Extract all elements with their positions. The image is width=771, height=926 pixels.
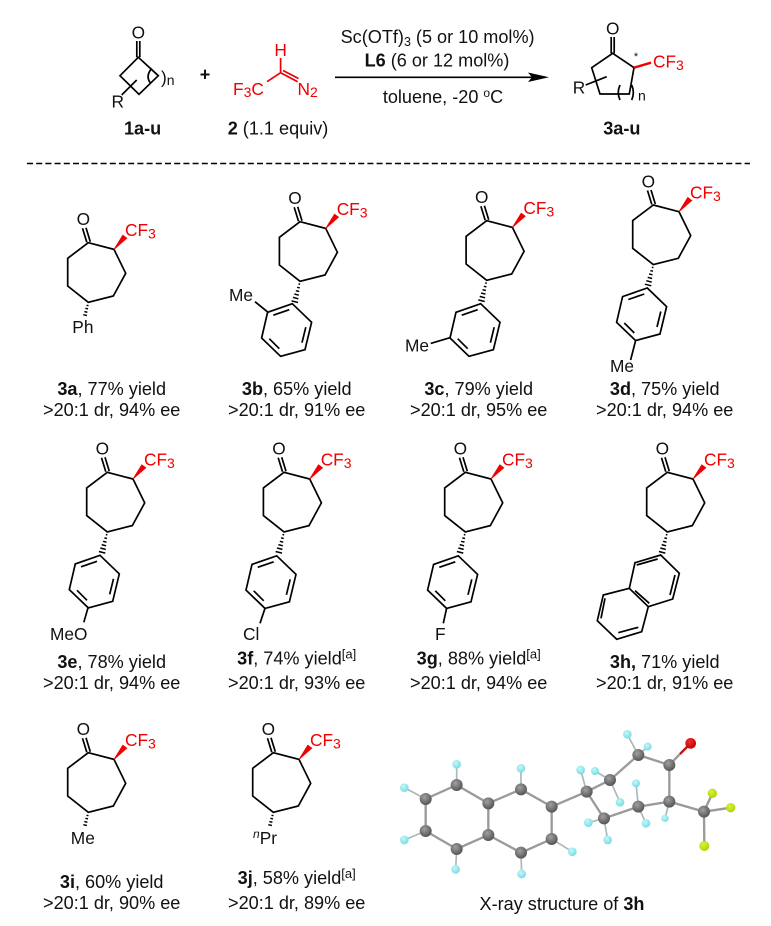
x-ray caption: X-ray structure of 3h: [480, 894, 644, 914]
reactant 2 diazo compound: [233, 40, 318, 100]
compound 3b: >20:1 dr, 91% ee: [228, 400, 365, 420]
structure 3c: 3: [546, 203, 554, 219]
product general structure: *: [634, 51, 639, 63]
fluorine atoms: [699, 789, 735, 851]
product general structure: O: [606, 18, 619, 38]
structure 3c: [405, 187, 554, 356]
reaction conditions: o: [483, 86, 490, 100]
scheme labels: [124, 118, 640, 138]
structure 3d: 3: [713, 188, 721, 204]
compound 3d: >20:1 dr, 94% ee: [596, 400, 733, 420]
structure 3e: 3: [167, 455, 175, 471]
compound 3e: >20:1 dr, 94% ee: [43, 673, 180, 693]
structure 3b: O: [288, 188, 302, 208]
carbon skeleton bonds: [426, 755, 731, 853]
structure 3e: CF: [144, 450, 167, 470]
compound 3a: >20:1 dr, 94% ee: [43, 400, 180, 420]
compound 3g: >20:1 dr, 94% ee: [410, 673, 547, 693]
x-ray crystal structure of 3h: [400, 730, 735, 914]
structure 3j: n: [253, 827, 260, 841]
structure 3i: CF: [125, 730, 148, 750]
caption 3a: 3a, 77% yield: [57, 379, 166, 399]
reaction conditions: (5 or 10 mol%): [411, 27, 535, 47]
reactant 1 ketone: R: [112, 92, 124, 112]
plus sign: +: [200, 64, 210, 84]
caption 3j: [a]: [341, 866, 356, 881]
caption 3h: 3h, 71% yield: [610, 652, 720, 672]
reaction arrow: [335, 72, 549, 82]
structure 3h: CF: [704, 450, 727, 470]
reactant 2 diazo compound: 2: [310, 84, 318, 100]
caption 3f: 3f, 74% yield: [237, 649, 342, 669]
scheme labels: 3a-u: [603, 118, 640, 138]
compound 3j: >20:1 dr, 89% ee: [228, 893, 365, 913]
structure 3e: [50, 439, 175, 644]
reactant 2 diazo compound: 3: [244, 84, 252, 100]
structure 3i: [68, 719, 156, 848]
compound 3h: [596, 439, 735, 693]
compound 3h: >20:1 dr, 91% ee: [596, 673, 733, 693]
structure 3a: O: [77, 209, 90, 229]
product general structure: R: [573, 78, 585, 98]
product general structure: CF: [653, 52, 676, 72]
structure 3h: 3: [727, 455, 735, 471]
structure 3f: Cl: [243, 624, 259, 644]
compound 3j: [228, 719, 365, 913]
structure 3c: Me: [405, 336, 429, 356]
reactant 1 ketone: n: [167, 72, 175, 88]
structure 3d: CF: [690, 182, 713, 202]
reaction conditions: 3: [404, 35, 411, 49]
compound 3a: [43, 209, 180, 420]
reactant 2 diazo compound: H: [274, 40, 287, 60]
structure 3f: CF: [321, 450, 344, 470]
reaction conditions: [341, 27, 535, 107]
structure 3b: [229, 188, 368, 356]
reaction conditions: toluene, -20: [383, 87, 478, 107]
hydrogen atoms: [400, 730, 669, 878]
structure 3g: O: [454, 439, 467, 459]
caption 3b: 3b, 65% yield: [242, 379, 352, 399]
structure 3f: 3: [344, 455, 352, 471]
caption 3e: 3e, 78% yield: [57, 652, 166, 672]
reactant 1 ketone: ): [161, 68, 167, 88]
compound 3c: [405, 187, 554, 420]
structure 3d: O: [642, 171, 655, 191]
structure 3c: O: [475, 187, 488, 207]
structure 3i: O: [77, 719, 90, 739]
caption 3j: 3j, 58% yield: [238, 868, 341, 888]
caption 3d: 3d, 75% yield: [610, 379, 720, 399]
compound 3i: >20:1 dr, 90% ee: [43, 893, 180, 913]
compound 3b: [228, 188, 368, 420]
structure 3b: Me: [229, 285, 253, 305]
structure 3a: [68, 209, 156, 337]
carbon atoms: [420, 749, 710, 859]
structure 3f: O: [272, 439, 286, 459]
structure 3g: [428, 439, 533, 644]
compound 3g: [410, 439, 547, 693]
caption 3f: [a]: [342, 647, 356, 662]
hydrogen bonds: [404, 734, 669, 874]
caption 3g: 3g, 88% yield: [417, 649, 526, 669]
structure 3j: [253, 719, 341, 848]
compound 3i: [43, 719, 180, 913]
caption 3i: 3i, 60% yield: [60, 872, 164, 892]
structure 3d: [610, 171, 721, 376]
structure 3a: Ph: [72, 317, 93, 337]
structure 3g: CF: [502, 450, 525, 470]
caption 3g: [a]: [526, 647, 541, 662]
product general structure: [573, 18, 684, 104]
scheme labels: 1a-u: [124, 118, 161, 138]
reaction scheme: [112, 18, 684, 138]
structure 3j: O: [262, 719, 275, 739]
structure 3c: CF: [523, 198, 546, 218]
compound 3e: [43, 439, 180, 693]
structure 3j: 3: [333, 736, 341, 752]
structure 3b: CF: [337, 199, 360, 219]
reactant 1 ketone: O: [132, 22, 145, 42]
structure 3g: F: [435, 624, 446, 644]
scheme labels: 2 (1.1 equiv): [228, 118, 328, 138]
structure 3j: CF: [310, 730, 333, 750]
reactant 2 diazo compound: F: [233, 79, 244, 99]
reactant 2 diazo compound: N: [298, 79, 310, 99]
caption 3c: 3c, 79% yield: [424, 379, 533, 399]
compound 3f: [228, 439, 365, 693]
product general structure: 3: [676, 57, 684, 73]
structure 3h: [597, 439, 735, 639]
structure 3a: CF: [125, 220, 148, 240]
product general structure: n: [638, 88, 646, 104]
reactant 1 ketone: [112, 22, 175, 112]
structure 3g: 3: [525, 455, 533, 471]
structure 3e: MeO: [50, 624, 87, 644]
structure 3a: 3: [148, 225, 156, 241]
structure 3f: [243, 439, 352, 644]
reaction conditions: L6 (6 or 12 mol%): [365, 50, 509, 70]
reaction conditions: Sc(OTf): [341, 27, 404, 47]
structure 3d: Me: [610, 356, 634, 376]
structure 3b: 3: [360, 204, 368, 220]
structure 3j: Pr: [260, 828, 277, 848]
reactant 2 diazo compound: C: [251, 79, 264, 99]
structure 3h: O: [656, 439, 669, 459]
compound 3d: [596, 171, 733, 420]
reaction conditions: C: [490, 87, 503, 107]
compound 3f: >20:1 dr, 93% ee: [228, 673, 365, 693]
compound 3c: >20:1 dr, 95% ee: [410, 400, 547, 420]
structure 3i: Me: [71, 828, 95, 848]
structure 3i: 3: [148, 736, 156, 752]
oxygen atom: [685, 738, 696, 749]
carbonyl bond: [669, 754, 680, 765]
structure 3e: O: [96, 439, 109, 459]
